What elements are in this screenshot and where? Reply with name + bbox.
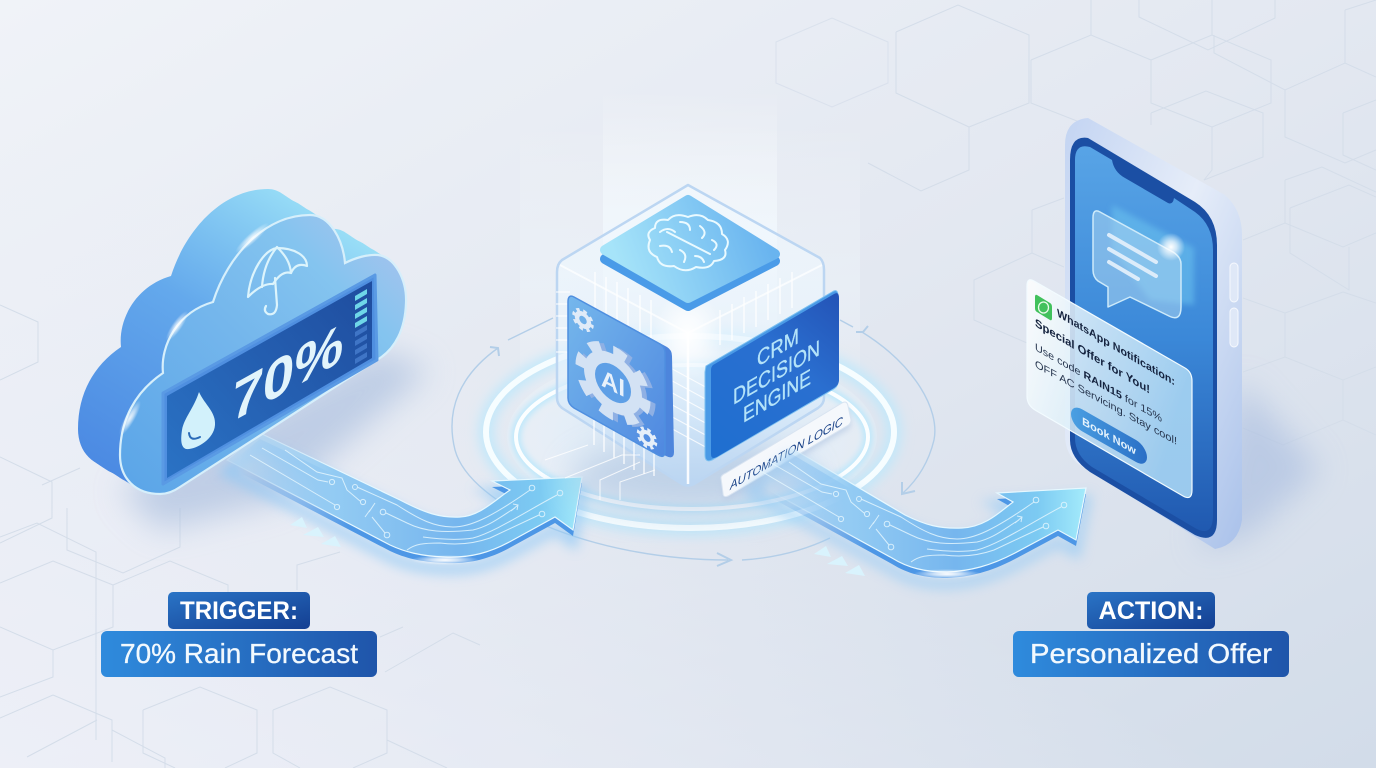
top plate with brain: [605, 200, 775, 306]
action heading: [1087, 592, 1215, 629]
notification text: Special Offer for You!: [1035, 316, 1150, 397]
arrow: trigger to engine: [227, 433, 582, 569]
CRM panel title: CRM: [757, 323, 799, 373]
trigger heading: TRIGGER:: [180, 597, 298, 625]
CRM panel title: ENGINE: [743, 364, 811, 429]
icon: small gear bottom: [638, 425, 656, 451]
cloud rim glints: [116, 220, 272, 438]
cloud weather module: [78, 189, 406, 494]
icon: main gear AI: [582, 336, 649, 432]
cloud body extrusion: [78, 189, 403, 492]
central glow: [652, 291, 724, 379]
arrow: engine to action: [750, 447, 1086, 584]
notification text: Use code RAIN15 for 15%: [1035, 342, 1162, 425]
action description: [1013, 631, 1289, 677]
WhatsApp notification card: [1027, 280, 1192, 498]
CRM panel: [705, 291, 839, 461]
shadow: phone: [1200, 380, 1320, 550]
label: trigger: [101, 592, 377, 677]
CRM panel title: DECISION: [733, 335, 820, 411]
label: action: [1013, 592, 1289, 677]
phone screen: [1075, 146, 1213, 531]
rain probability panel: [163, 275, 377, 484]
glass cube faces: [545, 265, 822, 500]
notification text: OFF AC Servicing. Stay cool!: [1035, 359, 1177, 448]
value: 70%: 70%: [229, 310, 347, 436]
orbit arrows: [452, 318, 935, 566]
book now button: [1071, 403, 1147, 468]
action heading: ACTION:: [1098, 597, 1204, 625]
book now button: Book Now: [1082, 414, 1137, 458]
cloud front face: [120, 215, 406, 494]
CRM panel title: [733, 323, 820, 429]
glass cube shell: [557, 185, 824, 486]
trigger description: 70% Rain Forecast: [120, 638, 358, 669]
AI panel: [568, 296, 674, 457]
engine shadow: [570, 442, 810, 514]
notification text: WhatsApp Notification:: [1057, 306, 1175, 388]
icon: small gear top: [574, 306, 592, 334]
automation logic tag: AUTOMATION LOGIC: [729, 413, 844, 493]
trigger heading: [168, 592, 310, 629]
notification text: [1035, 306, 1177, 448]
light beam behind engine: [520, 90, 860, 420]
shadow: cloud: [120, 350, 430, 530]
phone: [1027, 118, 1242, 549]
concentric glow rings: [486, 336, 894, 528]
side buttons: [1230, 263, 1238, 347]
CRM decision engine cube: [545, 185, 851, 501]
chat bubble icon: [1093, 205, 1194, 318]
trigger description: [101, 631, 377, 677]
level bars: [355, 289, 367, 364]
icon: brain: [648, 215, 728, 270]
icon: water drop: [181, 392, 215, 449]
icon: WhatsApp: [1035, 295, 1052, 320]
phone body: [1065, 118, 1242, 549]
icon: main gear AI: AI: [601, 365, 625, 403]
icon: umbrella: [248, 247, 307, 314]
phone bezel: [1070, 138, 1217, 538]
action description: Personalized Offer: [1030, 638, 1272, 669]
